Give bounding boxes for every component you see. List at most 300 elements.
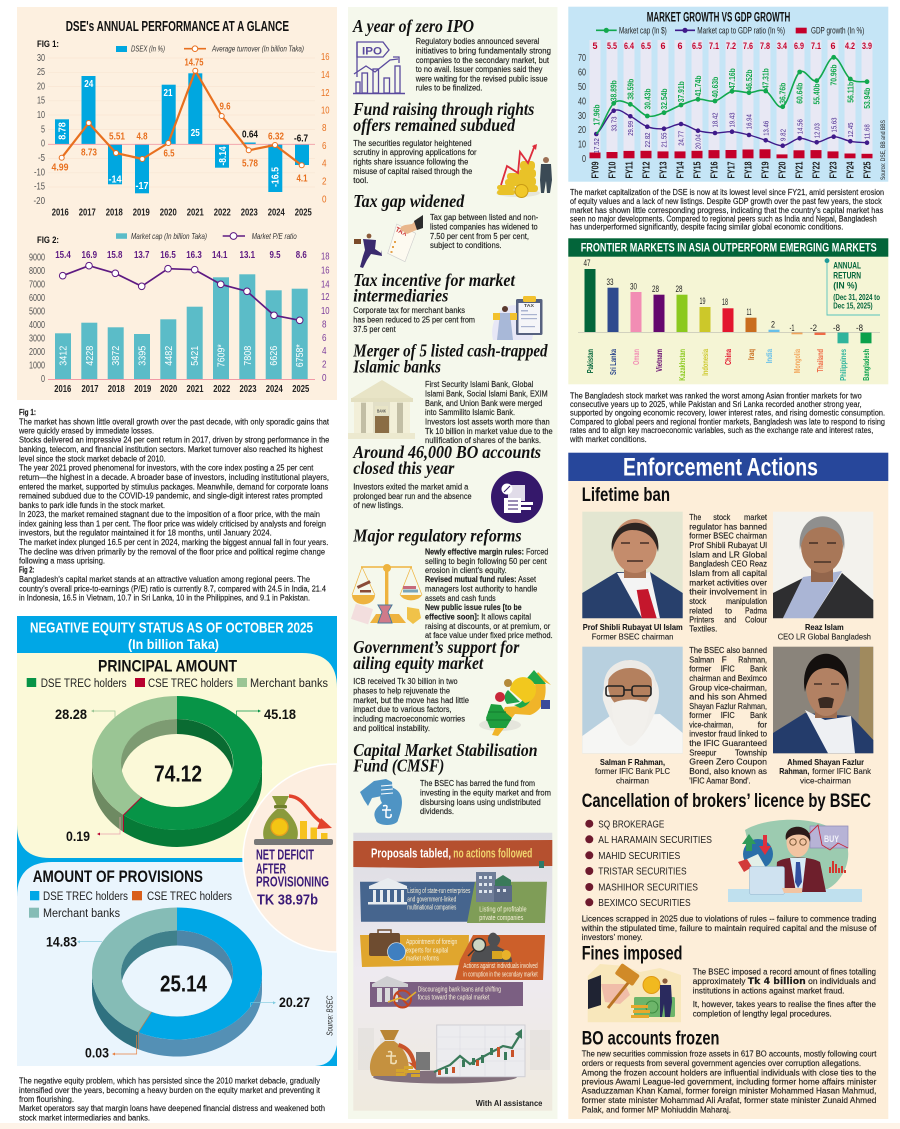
card: profitable private companies: private companies [479,915,524,922]
captions: first portrait row [583,622,871,641]
text: lifetime ban first paragraph: and [724,615,737,624]
text block: figure commentary: The market index plunged 16.5 per cent in 2024, marking the biggest annual fall in four years. [19,538,328,547]
icon: running man and tax form: TAX [394,226,408,238]
legend: FIG 1: Average turnover (In billion Taka) [211,44,304,54]
source: BSEC: Source: BSEC [326,996,334,1036]
heading: principal amount: PRINCIPAL AMOUNT [98,658,237,676]
right axis labels: 6 [322,333,327,344]
text block: figure commentary: Fig 2: [19,566,34,575]
text: lifetime ban second paragraph: chairman and Beximco [689,674,767,683]
panel: regulation and market news column [348,7,558,1119]
GDP values: 6.9 [794,41,804,52]
right axis labels: 2 [322,360,327,371]
text block: figure commentary: level since the stock market debacle of 2010. [19,454,166,463]
total: principal: 74.12 [154,760,202,786]
turnover line [59,68,304,168]
left axis labels: -20 [34,196,45,207]
market cap value labels: 3395 [138,345,148,366]
ratio values: 20.04 [696,134,703,149]
section: tax gap: 7.50 per cent from 5 per cent, [430,232,529,241]
text: fines: institutions in actions against market fraud. [693,986,844,995]
list: cancelled brokers [585,818,712,909]
text block: negative equity commentary: intensified over the years, becoming a heavy burden on the equity market and preventing it [19,1086,321,1095]
section: merger of banks [348,341,553,445]
text: lifetime ban first paragraph: to [725,606,732,615]
text: lifetime ban first paragraph: market activities over [689,578,767,587]
axis labels: 30 [578,111,586,122]
year labels FIG 2: 2023 [240,384,257,395]
axis labels: 50 [578,82,586,93]
fiscal year labels: FY22 [812,161,822,178]
card: profitable private companies: Listing of profitable [479,906,527,914]
P/E value labels: 14.1 [212,250,228,261]
card: discouraging bank loans [370,976,523,1008]
card: foreign experts: market reforms [406,955,439,962]
right axis labels: 14 [321,280,330,290]
chart: FIG 2 market cap and P/E: FIG 2: [37,235,59,246]
text: lifetime ban second paragraph: IFIC [721,665,735,674]
axis labels: 20 [578,125,586,136]
fiscal year labels: FY25 [862,161,874,178]
section: rights offers: scrutiny in approving applications for [353,148,477,157]
country labels: Mongolia [792,349,802,373]
ratio values: 13.46 [763,121,770,136]
text: lifetime ban second paragraph: Sreepur [689,748,717,757]
right axis labels: 10 [321,306,330,317]
value labels in bars [58,79,282,192]
section: CMSF: Fund (CMSF) [352,756,444,776]
card: actions against corruption: in corruption in the secondary market [463,971,538,978]
text: lifetime ban first paragraph: Prof Shibli Rubayat Ul [689,541,767,550]
legend: principal amount: DSE TREC holders [41,678,127,690]
text: lifetime ban first paragraph: market [744,513,768,522]
year labels FIG 1: 2024 [268,208,285,218]
text: lifetime ban second paragraph: Bank [750,711,768,720]
section: government support: impact due to various factors, [353,705,452,714]
year labels FIG 1: 2018 [106,208,123,218]
turnover value labels: 4.99 [52,163,69,174]
text: licence cancellation reasons: Licences scrapped in 2025 due to violations of rules -- failure to commence trading [582,915,877,924]
text block: negative equity commentary: Market operators say that margin loans have deepened financial distress and weakened both [19,1104,325,1113]
country labels: Bangladesh [861,349,871,381]
fiscal year labels: FY24 [846,161,856,178]
card: foreign experts [360,930,469,967]
text: lifetime ban first paragraph: related [689,606,713,615]
section: government support: phases to help rejuvenate the [353,686,451,696]
market cap line [596,55,869,134]
legend: FIG 2 [116,231,297,241]
section: regulatory reforms: New public issue rules [to be [425,603,522,612]
ratio values: 24.77 [679,131,686,146]
text block: frontier market commentary: The Bangladesh stock market was ranked the worst among Asian frontier markets for two [570,392,862,400]
GDP values [592,41,872,52]
portrait: Reaz Islam [773,512,873,618]
legend: principal amount: CSE TREC holders [148,678,233,690]
market cap values: 17.96b [592,104,601,126]
heading: BO accounts frozen: BO accounts frozen [582,1027,719,1049]
GDP values: 6 [830,41,836,52]
text: lifetime ban first paragraph: Islam from all capital [689,569,767,578]
country labels: Pakistan [585,349,595,373]
card: state-run enterprises [360,878,477,922]
section: BO accounts closed: Around 46,000 BO accounts [352,442,541,462]
text: fines: The BSEC imposed a record amount of fines totalling [693,968,876,977]
fiscal year labels [590,161,874,178]
market cap value labels: 6626 [269,345,280,366]
axis labels: 10 [578,140,586,151]
axis labels: 60 [578,68,586,78]
text block: figure commentary: banking, telecom, and financial institution sectors. Market turnover also reached its highest [19,445,323,454]
net deficit text: NET DEFICIT [256,846,314,864]
text: licence cancellation reasons [581,915,877,942]
left axis labels: 0 [41,374,45,385]
scene: money bag and stock chart [358,1025,550,1084]
section: tax gap: subject to conditions. [430,241,502,250]
text: lifetime ban first paragraph: manipulation [726,597,767,606]
text block: figure commentary: The market has shown little overall growth over the past decade, with only sporadic gains that [19,417,330,426]
section: merger of banks: Bank, and Union Bank were merged [425,399,542,408]
right axis labels: 12 [321,88,330,99]
country labels: Iraq [746,349,756,360]
source note: Source: DSE, BB and BBS [880,119,887,180]
P/E value labels: 15.4 [55,250,71,261]
section: regulatory reforms: at face value under fixed price method. [425,631,553,640]
text block: frontier market commentary: with market conditions. [569,435,647,444]
turnover value labels: 8.73 [81,148,97,159]
callouts: principal amount [55,707,296,844]
left axis labels: 2000 [29,347,45,358]
section: tax incentive: Corporate tax for merchant banks [353,306,465,315]
section: merger of banks: nullification of shares of the banks. [425,436,541,445]
heading: amount of provisions: AMOUNT OF PROVISIONS [33,867,203,886]
callouts: provisions: 14.83 [46,935,77,950]
legend: provisions [29,891,232,920]
return values: 11 [746,307,752,317]
section: merger of banks: into Sammilito Islamic Bank. [425,408,515,417]
text block: figure commentary: entered the market, supported by stimulus packages. Meanwhile, demand for corporate loans [19,482,328,491]
text: lifetime ban first paragraph: their involvement in [689,588,767,597]
year labels FIG 1: 2025 [295,208,312,218]
GDP values: 7.2 [726,41,736,52]
country labels: Oman [631,349,641,365]
DSEX bars [55,73,309,193]
turnover value labels: 5.78 [242,159,258,170]
icon: clipboard and person [492,296,542,340]
text block: figure commentary: were quickly erased by immediate losses. [18,426,154,435]
axis labels: 70 [578,53,586,64]
donut chart: provisions [92,908,262,1056]
market cap values: 46.52b [745,69,754,90]
right axis labels: 12 [321,292,330,303]
ratio values: 11.68 [865,124,872,139]
return values: 28 [652,284,659,294]
text: BO accounts frozen: Among the frozen account holders are influential individuals with close ties to the [582,1068,877,1077]
year labels FIG 1 [52,208,312,218]
section: tax incentive: 37.5 per cent [353,325,396,334]
year labels FIG 1: 2017 [79,208,96,218]
ratio values: 22.82 [645,132,652,148]
illustration: proposals tabled [353,833,552,1111]
left axis labels: 7000 [29,280,45,290]
GDP values: 7.1 [811,41,822,52]
section: government support: ICB received Tk 30 billion in two [353,677,458,686]
market cap values: 55.40b [813,83,822,104]
section: government support: market, but the move has had little [353,696,470,705]
GDP values: 7.8 [760,41,770,52]
credit: AI assistance: With AI assistance [476,1099,543,1108]
market cap values [592,64,872,126]
section: rights offers: misuse of capital raised through the [353,167,473,176]
callouts: principal amount: 0.19 [66,829,90,844]
market cap values: 70.96b [830,64,839,86]
GDP values: 6 [660,41,666,52]
section: zero IPO [352,16,551,94]
portrait: Salman F Rahman [582,647,683,753]
right axis labels: 10 [321,106,330,116]
list: cancelled brokers: BEXIMCO SECURITIES [598,897,691,909]
text: licence cancellation reasons: within the stipulated time, failure to maintain required capital and the misuse of [581,924,877,933]
right axis labels: 16 [321,266,330,276]
captions: second portrait row: former IFIC Bank [812,766,872,776]
section: tax gap: listed companies has widened to [430,222,538,232]
portrait: Ahmed Shayan Fazlur Rahman [773,647,873,753]
year labels FIG 2: 2025 [292,384,310,395]
captions: first portrait row: CEO LR Global Bangladesh [778,631,871,641]
country labels: Indonesia [700,349,710,376]
section: BO accounts closed [352,442,543,523]
left axis labels: 9000 [29,252,45,264]
market cap to GDP ratio line [594,108,869,148]
GDP values: 7.6 [743,41,753,52]
text block: figure commentary: Bangladesh's capital market stands at an attractive valuation among regional peers. The [19,575,311,584]
GDP values: 5 [592,41,598,52]
right axis labels: 0 [322,194,327,206]
text: lifetime ban first paragraph [689,513,768,634]
net deficit text: PROVISIONING [256,874,329,890]
section: BO accounts closed: closed this year [353,458,454,478]
fiscal year labels: FY18 [744,161,754,178]
right axis labels: 8 [322,123,327,134]
text block: negative equity commentary: The negative equity problem, which has persisted since the 2010 market debacle, gradually [19,1077,320,1086]
year labels FIG 1: 2020 [160,208,177,218]
value labels in bars: -8.14 [218,146,229,166]
text block: figure commentary: The decline was driven primarily by the removal of the floor price and political regime change [19,547,326,556]
text block: market growth commentary: has underperformed significantly, despite facing similar global economic conditions. [570,222,843,232]
heading: negative equity status [30,620,313,652]
left axis labels [29,252,45,385]
text: lifetime ban second paragraph: Shayan Fazlur Rahman, [689,702,767,711]
text: BO accounts frozen: orders or requests from several government agencies over corruption allegations. [582,1059,861,1068]
text: lifetime ban second paragraph: Green Zero Coupon [689,758,767,767]
left axis labels: 8000 [29,266,45,277]
country labels: Vietnam [654,349,664,372]
year labels FIG 1: 2021 [187,208,204,218]
text block: figure commentary: investors, but the regulator maintained it for 18 months, until January 2024. [19,529,272,538]
captions: first portrait row: Reaz Islam [805,622,844,632]
text: lifetime ban second paragraph: Township [735,748,767,757]
return values: -2 [810,323,817,333]
text: lifetime ban second paragraph: Rahman, [738,655,767,664]
year labels FIG 1: 2016 [52,208,69,218]
fiscal year labels: FY21 [794,161,806,178]
ratio values: 16.94 [747,114,754,129]
card: profitable private companies [467,872,547,923]
right axis labels: 6 [322,141,327,152]
panel: negative equity status [17,616,337,1066]
card: foreign experts: experts for capital [406,947,449,954]
return values: 30 [630,282,637,292]
section: government support: Government’s support for [353,637,519,657]
section: rights offers: The securities regulator heightened [353,139,472,148]
year labels FIG 2: 2018 [108,384,125,395]
GDP values: 3.9 [862,41,872,52]
banner: proposals tabled: Proposals tabled, [371,846,451,860]
country labels: China [723,349,733,365]
legend [596,26,864,36]
market cap values: 38.59b [626,79,635,100]
year labels FIG 2: 2021 [186,384,204,395]
ratio values: 29.99 [628,121,635,136]
section: merger of banks: Tk 10 billion in market value due to the [425,427,553,436]
section: rights offers [352,99,552,198]
note: annual return: (IN %) [833,280,857,292]
P/E value labels: 13.7 [134,250,150,261]
text: lifetime ban first paragraph: Printers [689,615,714,624]
text block: frontier market commentary [569,392,885,444]
portrait: Shibli Rubayat Ul Islam [582,512,683,618]
ratio values: 12.03 [814,123,821,138]
panel: frontier markets chart [568,238,888,384]
section: rights offers: tool. [353,176,368,185]
right axis labels: 8 [322,320,327,330]
fiscal year labels: FY11 [624,161,636,178]
left axis labels: 6000 [29,293,45,304]
card: state-run enterprises: multinational companies [407,905,457,912]
return values: 2 [771,320,775,330]
return values: 28 [676,284,682,294]
market cap values: 47.16b [728,68,737,89]
country labels [585,349,871,381]
list: cancelled brokers: MASHIHOR SECURITIES [598,882,698,894]
text block: figure commentary: following a mass uprising. [19,557,105,566]
year labels FIG 1: 2022 [214,208,231,218]
text: licence cancellation reasons: investors’ money. [582,933,643,942]
return values: 18 [722,297,728,307]
fiscal year labels: FY13 [658,161,670,178]
captions: second portrait row: chairman [616,776,649,786]
left axis labels: 5000 [29,306,45,318]
section: regulatory reforms: selling to begin following 50 per cent [425,557,547,566]
ratio values: 21.55 [662,132,669,148]
market cap values: 37.91b [677,81,686,102]
GDP values: 5.5 [607,41,618,52]
ratio values [594,112,872,153]
return values: -8 [856,323,863,333]
callouts: provisions: 0.03 [85,1046,109,1061]
section: merger of banks: Islamic banks [352,356,441,376]
text: BO accounts frozen: former state minister Mohammad Ali Arafat, former state minister Zunaid Ahmed [582,1096,877,1105]
text block: figure commentary: return—the highest in a decade. A broader base of investors, including institutional players, [19,473,329,482]
callouts: principal amount: 28.28 [55,707,87,722]
fiscal year labels: FY23 [828,161,840,178]
illustration: trader at laptop [728,820,862,902]
icon: hand holding taka bag [360,779,402,825]
value labels in bars: 25 [191,128,200,139]
chart: FIG 2 market cap and P/E [29,231,330,395]
card: actions against corruption [455,933,545,980]
ratio values: 12.45 [848,122,855,138]
right axis labels [321,52,330,206]
section: BO accounts closed: of new listings. [353,501,403,510]
text block: figure commentary: index gaining less than 1 per cent. The floor price was widely criticised by analysts and foreign [19,519,326,528]
legend: FIG 1: DSEX (In %) [131,44,165,54]
text: lifetime ban second paragraph: former [689,665,712,674]
market cap value labels: 3412 [58,345,70,366]
chart: FIG 1 DSEX and turnover [34,39,330,218]
list: cancelled brokers: MAHID SECURITIES [598,850,680,862]
market cap values: 53.94b [863,88,872,109]
donut chart: principal amount [92,696,262,847]
P/E value labels: 8.6 [296,250,307,261]
text block: figure commentary: Fig 1: [19,408,36,417]
country labels: Kazakhstan [677,349,687,381]
market cap values: 36.76b [779,83,788,104]
market cap value labels: 6758* [295,344,306,367]
text: lifetime ban second paragraph: and his son Ahmed [689,693,767,702]
axis labels [578,53,586,165]
GDP values: 6.4 [624,41,635,52]
market cap value labels: 4482 [164,345,175,366]
turnover value labels: 4.8 [136,132,148,143]
turnover value labels: -6.7 [294,134,308,145]
fiscal year labels: FY12 [642,161,652,178]
ratio values: 14.56 [797,119,804,134]
turnover value labels: 4.1 [296,174,308,185]
market cap value labels: 4228 [85,345,96,366]
icon: document circle [491,471,543,523]
market cap value labels: 7609* [216,344,228,367]
fiscal year labels: FY09 [590,161,602,178]
left axis labels: -15 [34,182,45,193]
return bars [584,269,872,343]
value labels in bars: 21 [164,88,173,99]
GDP growth bars [590,149,872,158]
return values: 19 [700,296,706,306]
captions: second portrait row: vice-chairman [800,776,851,786]
P/E value labels: 16.5 [160,250,176,261]
value labels in bars: -14 [108,174,122,186]
text: lifetime ban second paragraph: Bank [750,665,768,674]
P/E value labels: 16.3 [186,250,202,261]
icon: IPO chart [353,42,405,94]
P/E value labels: 16.9 [82,250,97,261]
section: merger of banks: Merger of 5 listed cash-trapped [352,341,548,361]
section: CMSF: investing in the equity market and from [420,788,551,798]
return values: -8 [833,323,840,333]
section: rights offers: rights share issuance following the [353,158,469,166]
card: discouraging bank loans: Discouraging bank loans and shifting [418,986,501,994]
banner: proposals tabled: no actions followed [453,846,532,860]
left axis labels: 30 [37,53,45,64]
left axis labels: 10 [37,110,45,121]
left axis labels: -10 [34,167,45,178]
value labels in bars: 8.78 [58,122,68,140]
section: merger of banks: Investors lost assets worth more than [425,418,550,426]
section: regulatory reforms: Newly effective margin rules: Forced [425,548,548,556]
list: cancelled brokers: AL HARAMAIN SECURITIES [598,834,712,846]
card: state-run enterprises: and government-linked [407,896,456,903]
right axis labels: 4 [322,346,327,357]
